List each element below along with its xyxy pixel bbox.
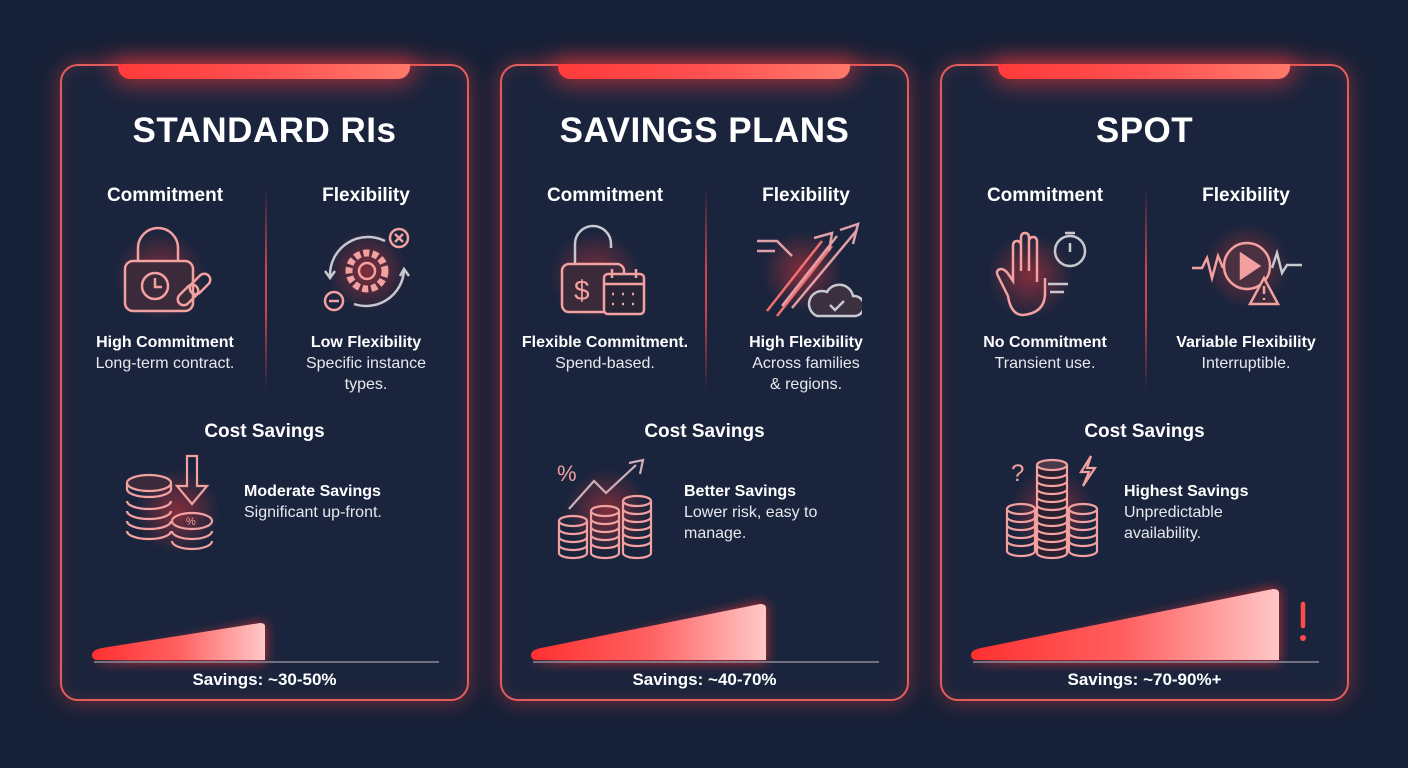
text: no commitment — [983, 334, 1107, 372]
text: highest savings: Highest Savings — [1124, 483, 1248, 500]
heading: cost savings: Cost Savings — [644, 421, 765, 442]
text: better savings: Lower risk, easy to — [684, 504, 817, 521]
text: better savings — [684, 483, 817, 542]
text: high flexibility: & regions. — [770, 376, 842, 393]
heading: cost savings: Cost Savings — [204, 421, 325, 442]
text: variable flexibility: Interruptible. — [1202, 355, 1290, 372]
icon: open lock with dollar and calendar — [554, 224, 646, 318]
text: flexible commitment — [522, 334, 688, 372]
icon: play button with waveform and warning — [1192, 228, 1302, 306]
text: variable flexibility: Variable Flexibility — [1176, 334, 1316, 351]
heading: flexibility: Flexibility — [1202, 185, 1290, 206]
text: low flexibility: Specific instance — [306, 355, 426, 372]
icon: rising arrow and coin stacks — [557, 458, 652, 560]
text: flexible commitment: Flexible Commitment. — [522, 334, 688, 351]
text: high flexibility: Across families — [752, 355, 860, 372]
heading: flexibility: Flexibility — [762, 185, 850, 206]
icon: rising arrow and coin stacks: % — [557, 461, 577, 486]
text: moderate savings: Significant up-front. — [244, 504, 382, 521]
panel: savings plans — [500, 64, 909, 701]
text: savings range: Savings: ~40-70% — [632, 670, 777, 689]
heading: commitment: Commitment — [987, 185, 1103, 206]
text: high commitment — [96, 334, 234, 372]
title: standard RIs: STANDARD RIs — [132, 111, 396, 150]
text: high commitment: High Commitment — [96, 334, 234, 351]
text: high commitment: Long-term contract. — [96, 355, 234, 372]
icon: exclamation — [1300, 604, 1306, 641]
text: high flexibility: High Flexibility — [749, 334, 863, 351]
heading: commitment: Commitment — [107, 185, 223, 206]
icon: lock with clock and chain — [118, 226, 212, 318]
text: moderate savings: Moderate Savings — [244, 483, 381, 500]
chart: savings wedge 40-70% — [531, 596, 879, 672]
text: low flexibility: Low Flexibility — [311, 334, 421, 351]
text: savings range: Savings: ~70-90%+ — [1067, 670, 1222, 689]
text: better savings: manage. — [684, 525, 746, 542]
text: low flexibility: types. — [345, 376, 387, 393]
text: low flexibility — [306, 334, 426, 393]
text: no commitment: No Commitment — [983, 334, 1107, 351]
icon: coins with down arrow: % — [186, 516, 196, 528]
icon: crossing arrows with cloud — [757, 222, 862, 318]
chart: savings wedge 30-50% — [92, 615, 439, 672]
heading: commitment: Commitment — [547, 185, 663, 206]
text: variable flexibility — [1176, 334, 1316, 372]
text: high flexibility — [749, 334, 863, 393]
heading: flexibility: Flexibility — [322, 185, 410, 206]
chart: savings wedge 70-90%+ — [971, 580, 1319, 672]
text: better savings: Better Savings — [684, 483, 796, 500]
text: highest savings: Unpredictable — [1124, 504, 1223, 521]
text: moderate savings — [244, 483, 382, 521]
heading: cost savings: Cost Savings — [1084, 421, 1205, 442]
text: highest savings — [1124, 483, 1248, 542]
panel: spot — [940, 64, 1349, 701]
icon: coins with down arrow — [126, 454, 216, 550]
icon: open lock with dollar and calendar: $ — [574, 275, 590, 306]
icon: tall coin stacks with question and lightning: ? — [1011, 460, 1024, 487]
text: highest savings: availability. — [1124, 525, 1201, 542]
title: spot: SPOT — [1096, 111, 1193, 150]
icon: hand with stopwatch — [992, 232, 1086, 316]
text: flexible commitment: Spend-based. — [555, 355, 655, 372]
title: savings plans: SAVINGS PLANS — [560, 111, 849, 150]
text: no commitment: Transient use. — [995, 355, 1095, 372]
icon: gear with arrows — [324, 228, 410, 312]
text: savings range: Savings: ~30-50% — [192, 670, 337, 689]
icon: tall coin stacks with question and lightning — [1006, 455, 1098, 560]
panel: standard RIs — [60, 64, 469, 701]
